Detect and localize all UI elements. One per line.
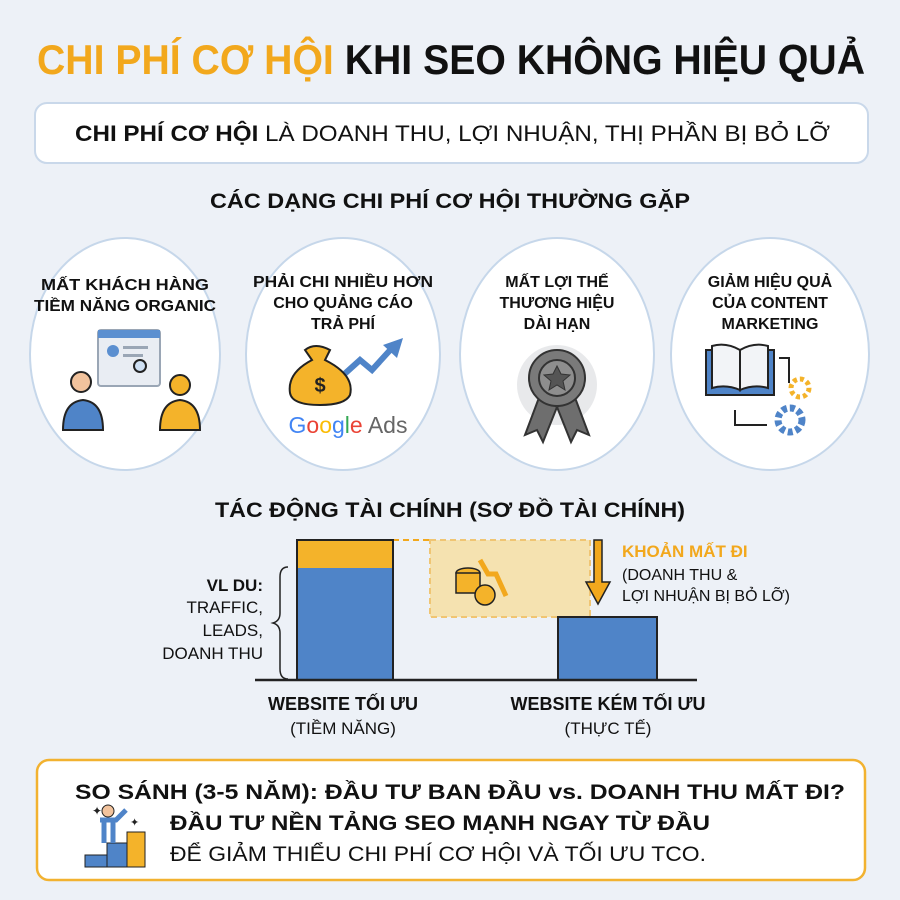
icon: person on steps: ✦ — [92, 804, 102, 818]
axis labels: WEBSITE KÉM TỐI ƯU — [511, 693, 705, 714]
brace label: VL DU: — [207, 576, 263, 595]
panel: brand advantage — [460, 238, 654, 470]
subtitle box: CHI PHÍ CƠ HỘI LÀ DOANH THU, LỢI NHUẬN, THỊ PHẦN BỊ BỎ LỠ — [75, 121, 830, 146]
subtitle box — [35, 103, 868, 163]
brace label: DOANH THU — [162, 644, 263, 663]
axis labels — [268, 693, 705, 738]
lost area dashed box — [393, 540, 590, 617]
title: CHI PHÍ CƠ HỘI KHI SEO KHÔNG HIỆU QUẢ — [37, 35, 865, 83]
callout: lost amount: LỢI NHUẬN BỊ BỎ LỠ) — [622, 585, 790, 605]
icon: book and gears — [706, 345, 809, 432]
icon: grey badge — [517, 345, 597, 442]
axis labels: (TIỀM NĂNG) — [290, 719, 396, 738]
panel: content marketing: GIẢM HIỆU QUẢ — [708, 272, 833, 291]
bar chart — [162, 540, 790, 738]
panel: brand advantage: DÀI HẠN — [524, 314, 590, 333]
panel: brand advantage: MẤT LỢI THẾ — [505, 272, 609, 291]
callout: lost amount — [622, 542, 790, 605]
panel: paid ads: PHẢI CHI NHIỀU HƠN — [253, 272, 433, 291]
panel: brand advantage: THƯƠNG HIỆU — [500, 293, 614, 312]
panel: content marketing: MARKETING — [722, 316, 818, 333]
icon: money bag with arrow: $ — [314, 375, 326, 397]
panel: paid ads: CHO QUẢNG CÁO — [273, 293, 413, 312]
panel: lost organic customers: TIỀM NĂNG ORGANIC — [34, 296, 216, 315]
panel: content marketing: CỦA CONTENT — [712, 293, 828, 312]
brace label: TRAFFIC, — [186, 598, 263, 617]
brace label: LEADS, — [203, 621, 263, 640]
panel: comparison: ĐỂ GIẢM THIỂU CHI PHÍ CƠ HỘI VÀ TỐI ƯU TCO. — [170, 842, 706, 866]
panel: comparison — [37, 760, 865, 880]
panel: paid ads: TRẢ PHÍ — [311, 314, 376, 333]
panel: lost organic customers — [30, 238, 220, 470]
brace label — [162, 567, 288, 679]
icon: users searching — [63, 330, 200, 430]
icon: person on steps — [85, 804, 145, 867]
google ads logo: Google Ads — [289, 412, 407, 438]
axis labels: (THỰC TẾ) — [565, 719, 651, 738]
panel: content marketing — [671, 238, 869, 470]
icon: money bag with arrow — [290, 338, 403, 405]
callout: lost amount: KHOẢN MẤT ĐI — [622, 542, 748, 561]
callout: lost amount: (DOANH THU & — [622, 567, 738, 584]
panel: comparison: ĐẦU TƯ NỀN TẢNG SEO MẠNH NGAY TỪ ĐẦU — [170, 811, 710, 835]
panel: comparison: SO SÁNH (3-5 NĂM): ĐẦU TƯ BAN ĐẦU vs. DOANH THU MẤT ĐI? — [75, 781, 845, 804]
section heading: financial impact: TÁC ĐỘNG TÀI CHÍNH (SƠ ĐỒ TÀI CHÍNH) — [215, 498, 685, 522]
panel: paid ads — [246, 238, 440, 470]
panel: lost organic customers: MẤT KHÁCH HÀNG — [41, 275, 209, 294]
bar: optimized website — [297, 540, 393, 680]
bar: poorly optimized website — [558, 617, 657, 680]
section heading: types: CÁC DẠNG CHI PHÍ CƠ HỘI THƯỜNG GẶP — [210, 189, 690, 213]
icon: person on steps: ✦ — [130, 817, 139, 829]
axis labels: WEBSITE TỐI ƯU — [268, 693, 418, 714]
arrow: down — [586, 540, 610, 604]
